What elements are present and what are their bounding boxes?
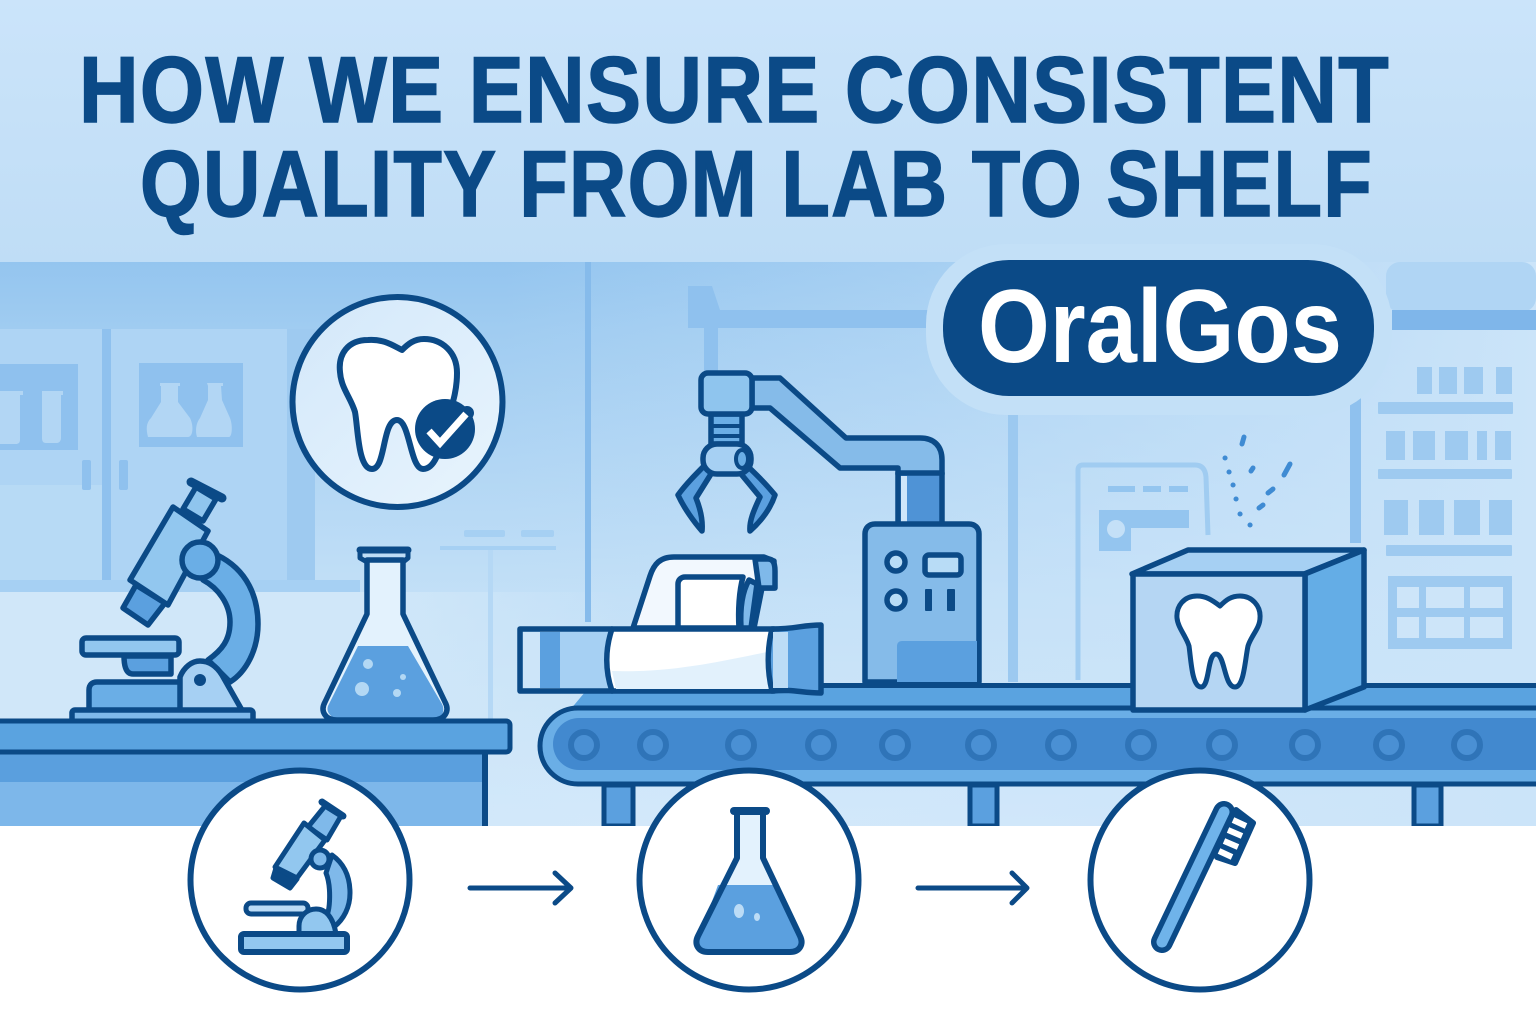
- header background: [0, 0, 1536, 262]
- title: HOW WE ENSURE CONSISTENT: [79, 37, 1390, 142]
- tube packaging: [520, 557, 821, 693]
- arrow 2: [918, 873, 1027, 903]
- logo badge: OralGos: [926, 244, 1392, 415]
- flask: [323, 550, 447, 720]
- robot arm and control unit: [678, 373, 979, 682]
- shipping box: [1132, 550, 1364, 710]
- step 2: flask icon: [640, 770, 858, 990]
- arrow 1: [470, 873, 571, 903]
- icon: tooth with check badge: [292, 297, 502, 507]
- microscope: [72, 482, 258, 722]
- conveyor belt: [540, 686, 1536, 826]
- lab bench: [0, 721, 510, 826]
- spray particles: [1225, 437, 1290, 525]
- background panel: [1078, 465, 1208, 680]
- step 1: microscope icon: [190, 770, 410, 990]
- footer background: [0, 826, 1536, 1024]
- background shelves: [1378, 367, 1513, 649]
- title: [79, 37, 1390, 236]
- step 3: toothbrush icon: [1090, 770, 1310, 990]
- logo badge: OralGos: OralGos: [978, 269, 1342, 385]
- background scene: lab wall and cabinets: [0, 262, 1536, 826]
